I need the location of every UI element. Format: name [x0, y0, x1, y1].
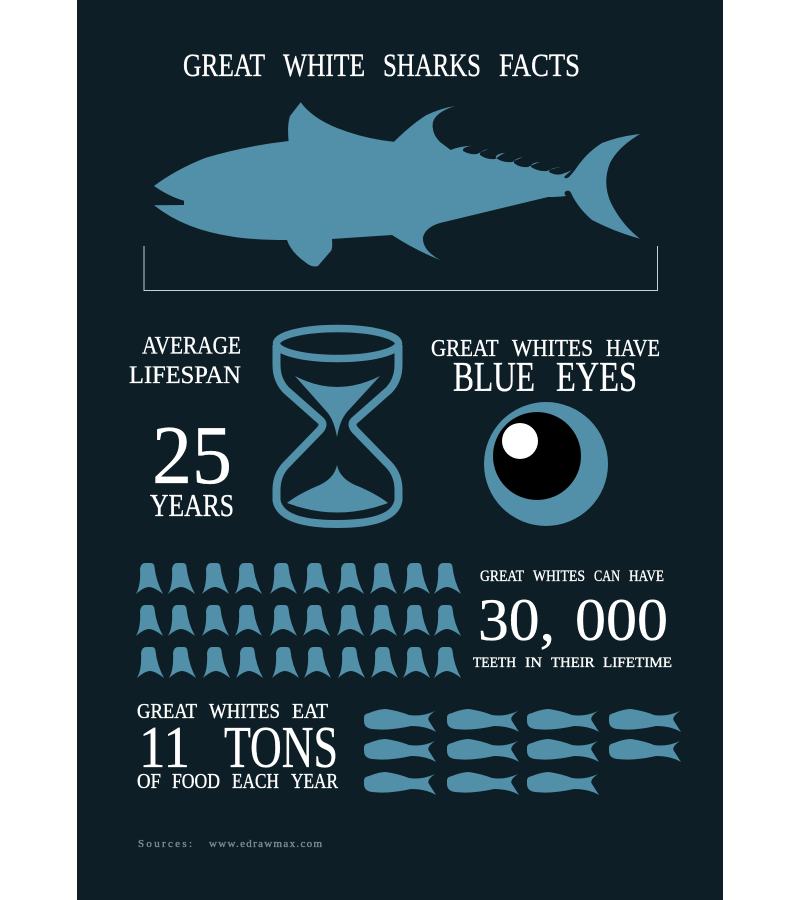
food text: WHITES [209, 699, 280, 723]
teeth text: GREAT [480, 568, 524, 585]
shark silhouette [154, 102, 640, 266]
fish pictogram [364, 709, 681, 795]
title [183, 48, 580, 84]
food text [137, 699, 338, 793]
length bracket [144, 246, 658, 290]
teeth text: LIFETIME [603, 655, 672, 671]
blue eyes text [431, 336, 660, 401]
food text: FOOD [172, 769, 220, 793]
teeth text: TEETH [473, 655, 516, 671]
teeth text: WHITES [533, 568, 585, 585]
blue eyes text: BLUE [453, 355, 535, 401]
title: SHARKS [383, 48, 481, 84]
sources [138, 838, 322, 850]
lifespan text: LIFESPAN [129, 362, 241, 389]
teeth pictogram [136, 563, 461, 678]
blue eyes text: EYES [556, 355, 637, 401]
title: GREAT [183, 48, 265, 84]
teeth text: THEIR [551, 655, 594, 671]
lifespan text: YEARS [150, 487, 234, 523]
food text: YEAR [291, 769, 338, 793]
blue eyes text: HAVE [606, 336, 660, 362]
teeth text: 30, [478, 587, 555, 653]
teeth text: 000 [575, 587, 668, 653]
teeth text: HAVE [629, 568, 664, 585]
food text: EACH [232, 769, 279, 793]
teeth text: IN [525, 655, 542, 671]
lifespan text: 25 [152, 409, 232, 502]
lifespan text [129, 332, 241, 523]
food text: 11 [139, 714, 190, 780]
teeth text [473, 568, 672, 671]
blue eyes text: WHITES [512, 336, 593, 362]
teeth text: CAN [594, 568, 620, 585]
food text: OF [137, 769, 161, 793]
icon: eye [484, 402, 608, 526]
title: WHITE [283, 48, 365, 84]
food text: TONS [224, 714, 338, 780]
lifespan text: AVERAGE [142, 332, 241, 360]
food text: GREAT [137, 699, 197, 723]
sources: Sources: [138, 838, 192, 850]
title: FACTS [499, 48, 580, 84]
food text: EAT [292, 699, 328, 723]
icon: hourglass [276, 328, 398, 524]
sources: www.edrawmax.com [209, 838, 322, 850]
blue eyes text: GREAT [431, 336, 499, 362]
